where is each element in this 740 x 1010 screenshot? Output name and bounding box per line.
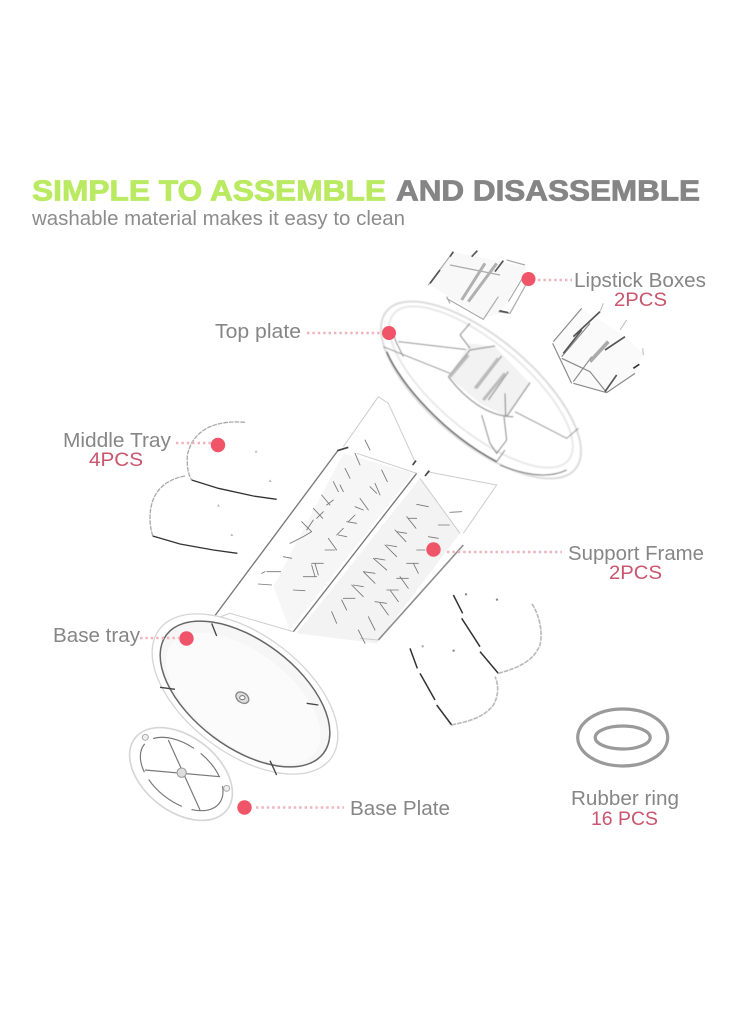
base tray [124,582,366,806]
callout: top plate: Top plate [215,321,301,343]
callout: support frame: 2PCS [609,563,662,584]
base plate [112,709,250,839]
callout: rubber ring [571,788,679,830]
callout: middle tray: 4PCS [89,450,143,471]
callout: top plate [215,321,396,343]
callout: support frame [426,542,704,584]
title: AND DISASSEMBLE [396,176,700,208]
callout: middle tray: Middle Tray [63,430,171,452]
top plate [353,271,609,509]
title: SIMPLE TO ASSEMBLE [32,176,386,208]
callout: lipstick boxes [522,270,706,311]
callout: base tray [53,625,194,647]
title [32,176,700,208]
subtitle: washable material makes it easy to clean [31,208,405,230]
middle tray: left lower [150,476,237,553]
support frame [212,397,497,643]
callout: rubber ring: 16 PCS [591,809,658,830]
middle tray: right lower [410,645,498,725]
lipstick box: upper [428,251,527,319]
callout: rubber ring: Rubber ring [571,788,679,810]
callout: lipstick boxes: Lipstick Boxes [574,270,706,292]
callout: base plate [237,798,450,820]
callout: base tray: Base tray [53,625,140,647]
lipstick box: lower [553,303,643,393]
callout: middle tray [63,430,225,471]
middle tray: right upper [453,593,541,673]
rubber ring [578,709,668,766]
callout: support frame: Support Frame [568,543,704,565]
middle tray: left upper [187,422,277,499]
callout: base plate: Base Plate [350,798,450,820]
callout: lipstick boxes: 2PCS [614,290,667,311]
